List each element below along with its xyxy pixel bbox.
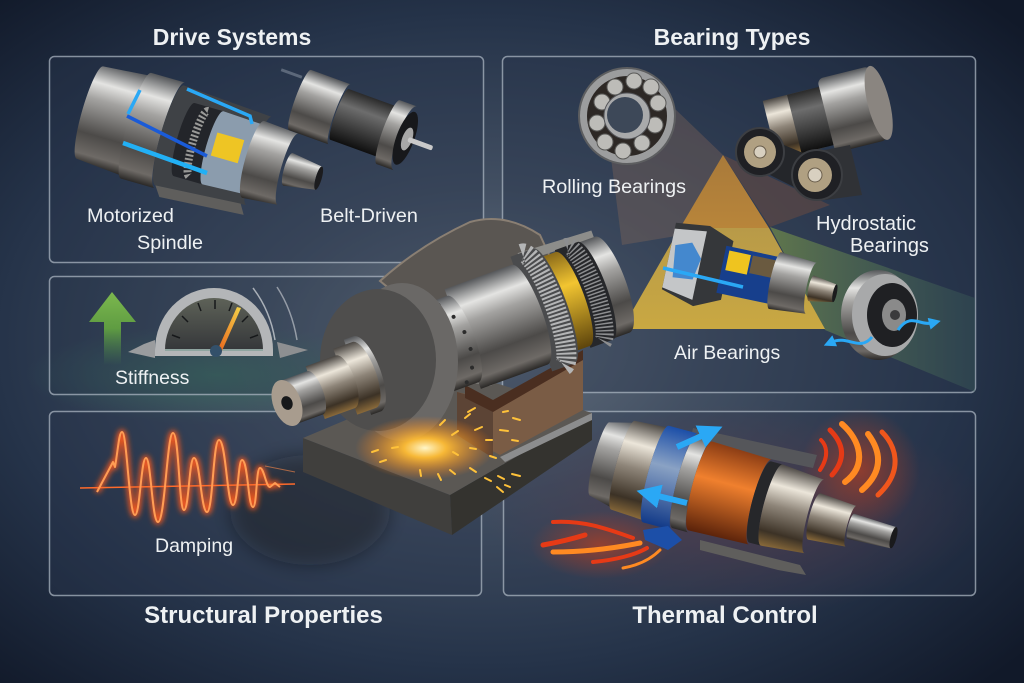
icon: air bearing wheel bbox=[832, 270, 932, 360]
illustration: bearing housing arc bbox=[380, 219, 570, 330]
icon: rolling bearing bbox=[579, 68, 675, 164]
icon: up arrow bbox=[89, 292, 136, 365]
icon: hydrostatic bearing assembly bbox=[736, 63, 899, 200]
icon: thermal flames bbox=[530, 408, 920, 579]
label: hydrostatic bearings: Bearings bbox=[850, 235, 929, 257]
illustration: central spindle body bbox=[407, 222, 646, 409]
diagram: bearing triangle bbox=[622, 155, 825, 329]
label: stiffness: Stiffness bbox=[115, 367, 190, 389]
icon: stiffness gauge bbox=[128, 287, 308, 358]
panel: stiffness bbox=[50, 276, 450, 394]
decorative beam: hydrostatic link bbox=[723, 155, 830, 227]
heading: drive systems: Drive Systems bbox=[153, 24, 311, 50]
panel: damping bbox=[50, 412, 482, 596]
icon: air bearing spindle bbox=[660, 219, 845, 335]
heading: structural properties: Structural Properties bbox=[144, 602, 383, 629]
label: rolling bearings: Rolling Bearings bbox=[542, 176, 686, 198]
icon: belt-driven spindle bbox=[262, 58, 444, 180]
decorative: metal dust bbox=[230, 455, 390, 565]
illustration: workpiece plate bbox=[303, 372, 592, 535]
icon: motorized spindle bbox=[65, 57, 337, 239]
label: belt-driven: Belt-Driven bbox=[320, 205, 418, 227]
panel: bearing types bbox=[502, 56, 976, 392]
heading: bearing types: Bearing Types bbox=[654, 24, 810, 50]
illustration: support block bbox=[457, 323, 613, 458]
heading: thermal control: Thermal Control bbox=[632, 602, 818, 629]
label: hydrostatic bearings: Hydrostatic bbox=[816, 213, 916, 235]
decorative beam: green wedge bbox=[770, 227, 975, 392]
illustration: grinding wheel bbox=[320, 283, 458, 441]
label: damping: Damping bbox=[155, 535, 233, 557]
chart: damping waveform bbox=[80, 432, 295, 522]
panel: thermal control bbox=[504, 412, 976, 596]
background: stiffness tint bbox=[25, 325, 405, 425]
illustration: central spindle shaft bbox=[260, 332, 394, 445]
label: motorized spindle: Motorized bbox=[87, 205, 174, 227]
illustration: sparks bbox=[355, 408, 520, 492]
label: motorized spindle: Spindle bbox=[137, 232, 203, 254]
background: thermal tint bbox=[485, 405, 985, 615]
label: air bearings: Air Bearings bbox=[674, 342, 780, 364]
icon: thermal spindle bbox=[581, 409, 909, 587]
panel: drive systems bbox=[50, 56, 484, 262]
decorative beam: rolling bearing link bbox=[610, 106, 723, 245]
